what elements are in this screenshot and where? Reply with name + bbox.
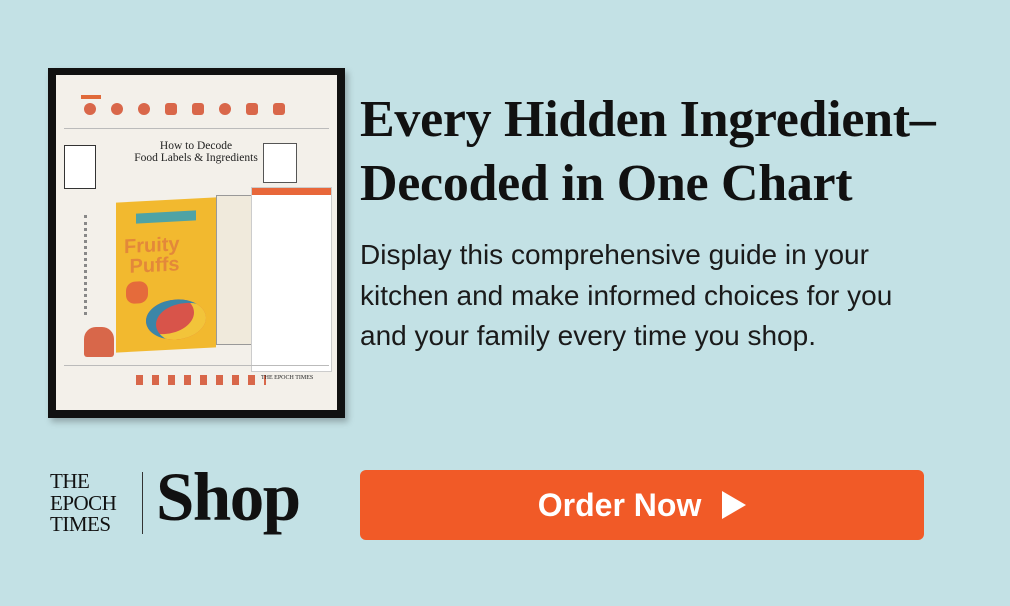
description: Display this comprehensive guide in your kitchen and make informed choices for you and your family every time you shop. bbox=[360, 239, 892, 351]
logo wordmark: EPOCH bbox=[50, 490, 116, 514]
left process illustration bbox=[84, 215, 108, 315]
logo wordmark bbox=[50, 469, 116, 536]
logo wordmark: THE bbox=[50, 469, 89, 493]
poster paper bbox=[56, 75, 337, 410]
checklist bbox=[263, 143, 297, 183]
order button: Order Now bbox=[538, 486, 701, 522]
cereal box: Puffs bbox=[130, 253, 180, 278]
headline: Every Hidden Ingredient– bbox=[360, 91, 935, 148]
order button bbox=[360, 470, 924, 540]
logo wordmark: TIMES bbox=[50, 512, 110, 536]
logo bbox=[50, 459, 300, 536]
bottom icons bbox=[136, 375, 266, 385]
ingredients list bbox=[251, 187, 332, 372]
shop text: Shop bbox=[156, 459, 300, 535]
poster title: How to Decode bbox=[160, 140, 232, 152]
headline: Decoded in One Chart bbox=[360, 155, 852, 212]
poster frame bbox=[48, 68, 345, 418]
top icon row bbox=[81, 95, 285, 115]
poster paper: THE EPOCH TIMES bbox=[261, 375, 313, 381]
nutrition label bbox=[64, 145, 96, 189]
cereal box bbox=[116, 197, 216, 353]
cereal box: Fruity bbox=[124, 233, 180, 258]
poster title bbox=[134, 140, 258, 164]
poster title: Food Labels & Ingredients bbox=[134, 152, 258, 164]
headline bbox=[360, 91, 936, 212]
box side panel bbox=[216, 195, 252, 345]
family figures bbox=[84, 327, 114, 357]
